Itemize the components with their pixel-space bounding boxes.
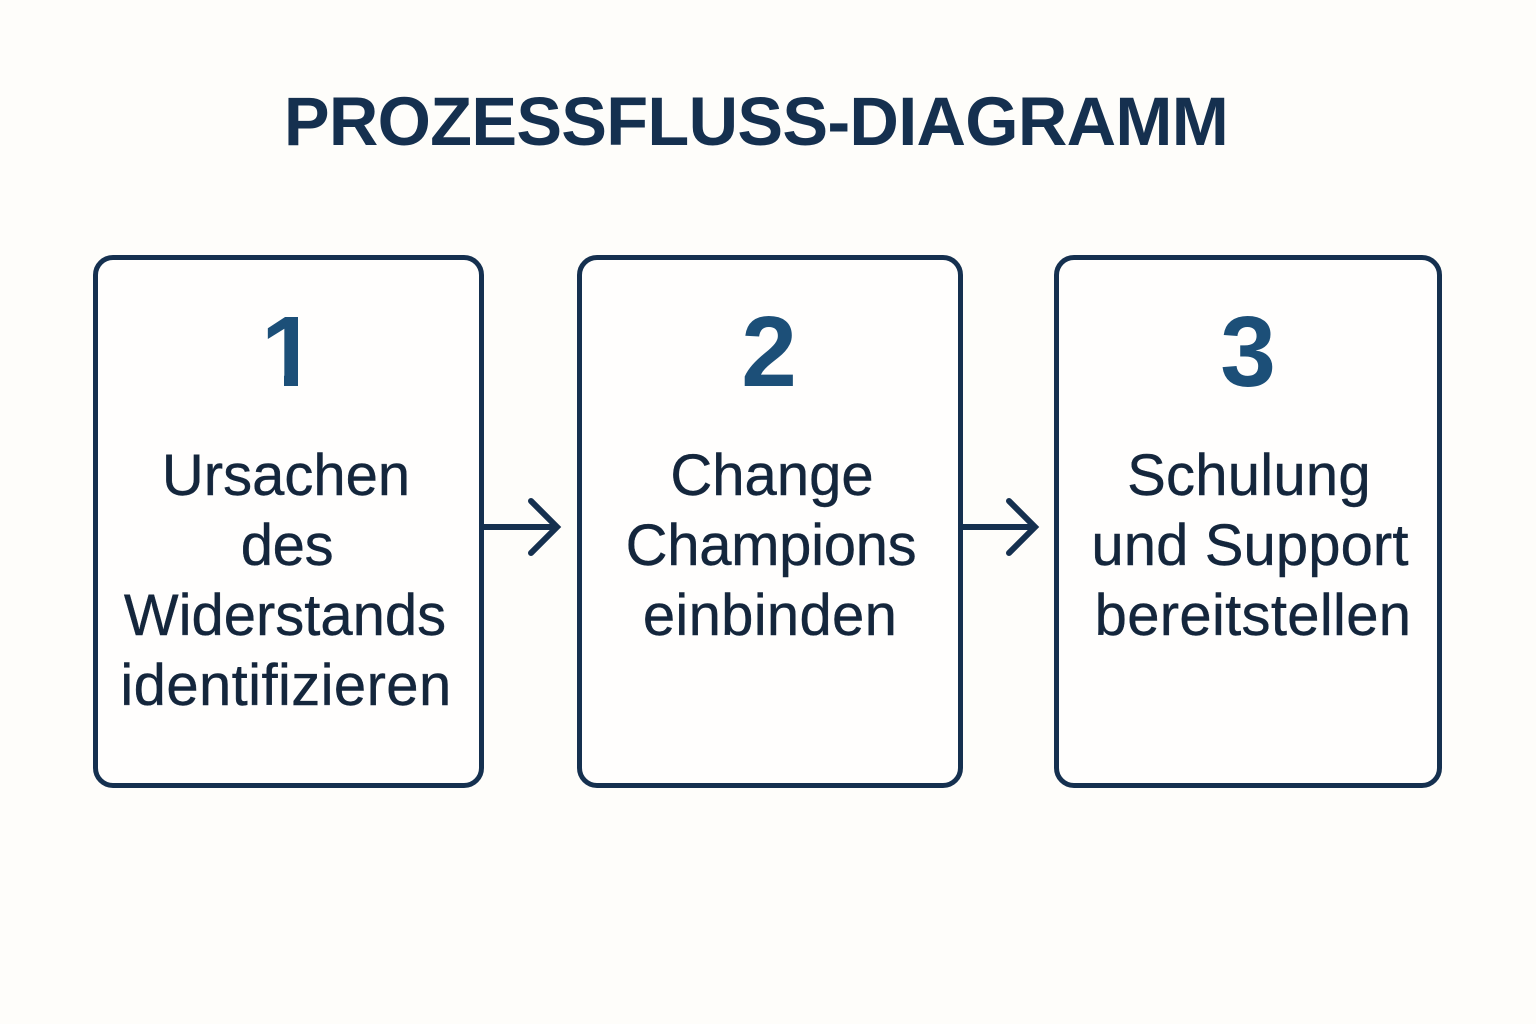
text: step 1: Widerstands [124, 583, 446, 648]
text: step 2 [626, 443, 916, 648]
number 3: 3 [1220, 296, 1276, 408]
number 2: 2 [741, 296, 797, 408]
text: step 2: Champions [626, 513, 916, 578]
text: step 1 [120, 443, 452, 718]
text: step 2: einbinden [643, 583, 897, 648]
panel: step 2 [577, 255, 963, 788]
text: step 1: identifizieren [120, 653, 452, 718]
panel: step 1 [93, 255, 484, 788]
text: step 1: Ursachen [162, 443, 410, 508]
text: step 3: Schulung [1127, 443, 1371, 508]
text: step 3 [1091, 443, 1411, 648]
panel: step 3 [1054, 255, 1442, 788]
text: step 1: des [241, 513, 333, 578]
number 1: 1 [261, 296, 317, 408]
text: step 2: Change [670, 443, 874, 508]
arrow: step 1 to 2 [484, 498, 562, 556]
text: step 3: und Support [1091, 513, 1409, 578]
title: PROZESSFLUSS-DIAGRAMM [284, 83, 1228, 160]
text: step 3: bereitstellen [1095, 583, 1411, 648]
arrow: step 2 to 3 [963, 498, 1040, 556]
